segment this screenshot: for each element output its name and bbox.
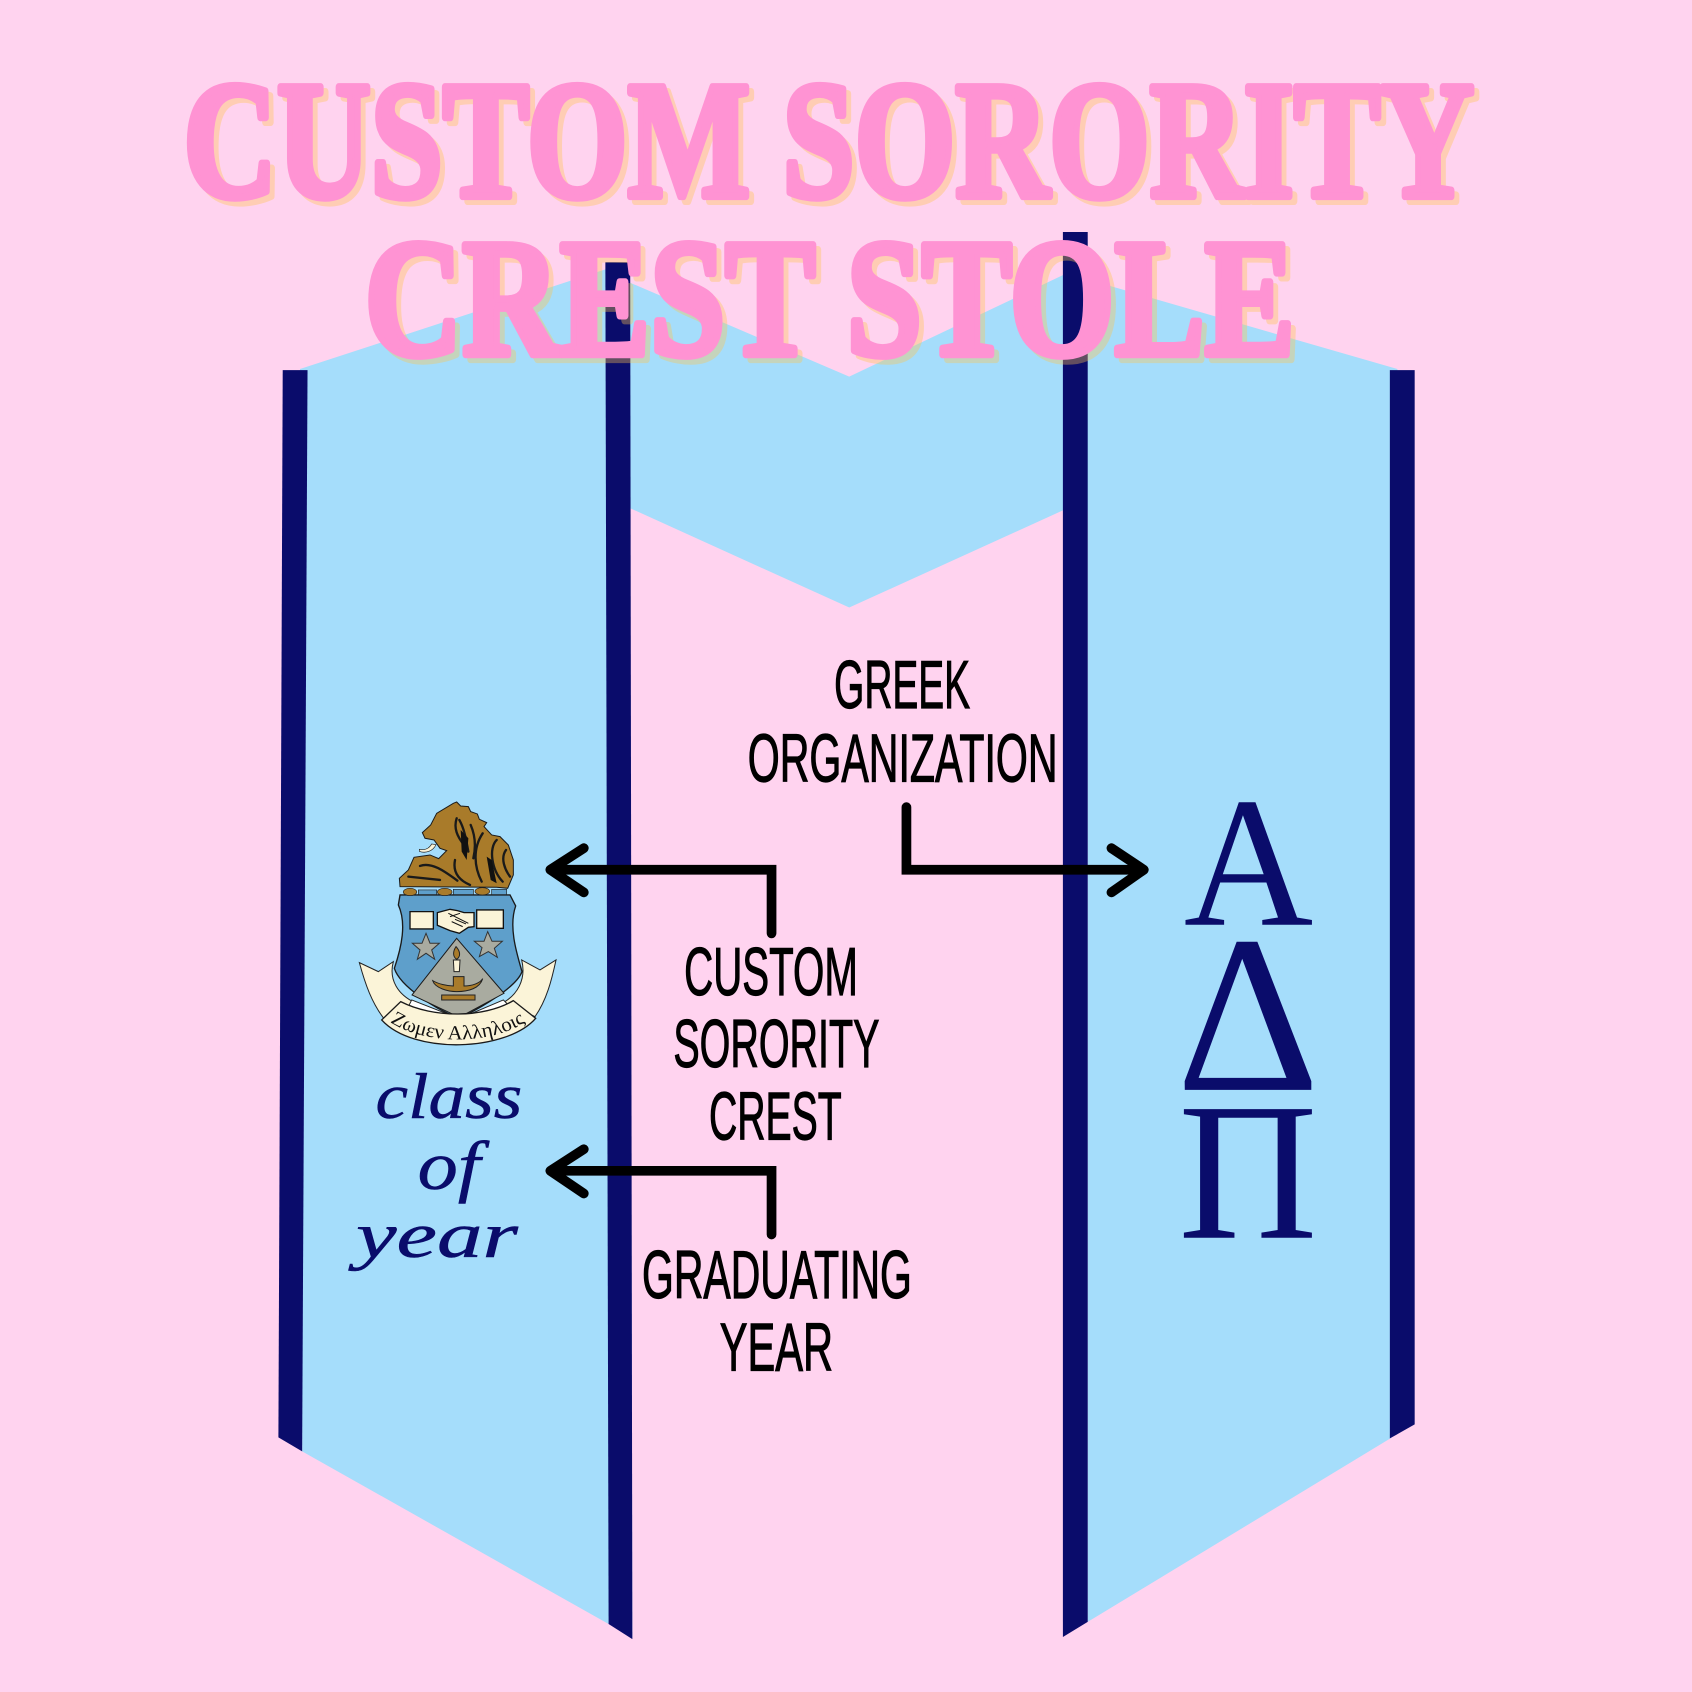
arrow: year label to class of year: [550, 1149, 772, 1234]
title: CREST STOLE: [365, 206, 1295, 391]
greek letters: Alpha Delta Pi: Π: [1178, 1064, 1318, 1281]
label: custom sorority crest: [673, 934, 879, 1155]
lamp: [433, 977, 483, 1000]
ribbon tails: [359, 962, 415, 1020]
chevron: [412, 938, 504, 1017]
ribbon white underside: [407, 1000, 513, 1023]
wreath: [403, 888, 490, 896]
script text: class of year: year: [348, 1200, 519, 1272]
label: graduating year: [642, 1237, 912, 1385]
navy stripe: inner left: [605, 262, 632, 1639]
greek letters: Alpha Delta Pi: [1176, 761, 1320, 1281]
label: custom sorority crest: SORORITY: [673, 1006, 879, 1082]
title: CREST STOLE: [370, 211, 1300, 396]
script text: class of year: class: [376, 1061, 522, 1133]
shield: [394, 895, 522, 1018]
label: greek organization: GREEK: [834, 647, 970, 723]
navy stripe: far left: [278, 370, 308, 1451]
handshake: [410, 910, 503, 929]
label: graduating year: YEAR: [720, 1309, 833, 1385]
label: greek organization: [748, 647, 1058, 796]
title: [183, 48, 1479, 396]
label: greek organization: ORGANIZATION: [748, 720, 1057, 796]
navy stripe: far right: [1390, 370, 1415, 1438]
script text: class of year: of: [418, 1127, 490, 1204]
lion: [399, 802, 513, 888]
label: custom sorority crest: CREST: [709, 1079, 842, 1155]
arrow: crest label to crest: [550, 848, 772, 933]
stars: [412, 933, 439, 959]
navy stripe: inner right: [1063, 232, 1088, 1637]
motto text: Ζωμεν Αλληλοις: [390, 1012, 526, 1040]
label: custom sorority crest: CUSTOM: [684, 934, 858, 1010]
stole body: [300, 265, 1397, 1638]
stole: graduation sash: [278, 232, 1415, 1639]
label: graduating year: GRADUATING: [642, 1237, 912, 1313]
motto ribbon: [382, 1001, 536, 1045]
greek letters: Alpha Delta Pi: Α: [1184, 761, 1313, 966]
icon: sorority crest: [358, 801, 557, 1046]
greek letters: Alpha Delta Pi: Δ: [1176, 890, 1320, 1139]
arrow: greek organization to letters: [906, 807, 1144, 892]
script text: class of year: [348, 1061, 522, 1272]
